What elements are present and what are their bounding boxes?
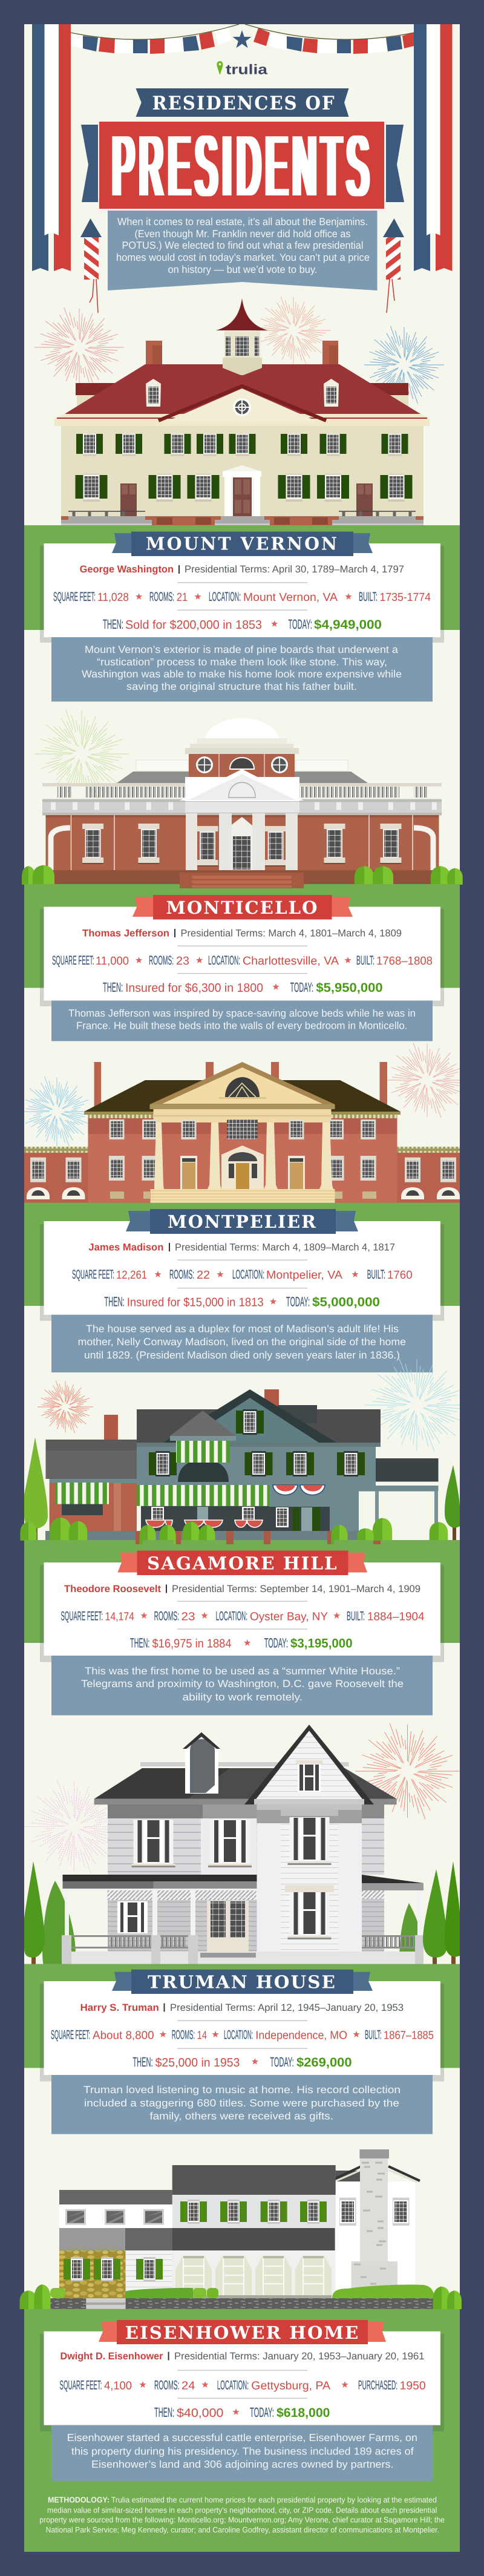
upper main wall — [172, 2195, 336, 2228]
roof balustrades — [136, 760, 348, 771]
fact box: ability to work remotely. — [183, 1691, 302, 1703]
cupola — [216, 298, 268, 375]
facts row: LOCATION: — [208, 954, 240, 968]
right front trees — [423, 1861, 460, 1964]
right rocket — [383, 218, 404, 313]
president and terms: Presidential Terms: January 20, 1953–January 20, 1961 — [174, 2351, 425, 2362]
stone wall — [50, 2298, 434, 2309]
wings — [76, 383, 408, 419]
facts row: 24 — [182, 2379, 195, 2392]
dormers — [146, 379, 339, 407]
intro text box: on history — but we’d vote to buy. — [168, 264, 317, 275]
right body and porch — [269, 1484, 438, 1531]
then and today prices — [103, 617, 382, 632]
then and today prices — [132, 2054, 352, 2070]
intro text box — [108, 211, 378, 290]
facts row: 21 — [177, 591, 188, 604]
facts row: BUILT: — [359, 590, 378, 604]
fireworks: monticello — [34, 710, 129, 798]
left upper roof — [59, 2190, 172, 2204]
fact box: this property during his presidency. The business included 189 acres of — [71, 2446, 414, 2457]
then and today prices: THEN: — [103, 617, 123, 632]
main awning — [137, 1485, 269, 1506]
then and today prices: TODAY: — [250, 2405, 274, 2420]
steps — [61, 516, 424, 526]
pediment — [180, 769, 304, 801]
info panel: mount vernon — [40, 531, 444, 701]
chimney centre — [264, 1389, 279, 1408]
fact box — [51, 1001, 433, 1041]
header: ribbons, bunting, logo and title — [32, 24, 453, 313]
fact box — [51, 1656, 433, 1716]
small dormer — [183, 1732, 220, 1794]
intro text box: (Even though Mr. Franklin never did hold office as — [134, 228, 351, 240]
shrubs — [22, 865, 463, 885]
facts row: ROOMS: — [149, 590, 174, 604]
facts row: LOCATION: — [217, 2378, 249, 2392]
fact box: Washington was able to make his home look more expensive while — [82, 669, 402, 680]
base vents — [110, 1191, 376, 1199]
facts row: 23 — [176, 955, 189, 968]
then and today prices: $40,000 — [177, 2407, 223, 2420]
banner: sagamore hill — [117, 1550, 367, 1575]
logo: trulia — [217, 61, 267, 77]
methodology note: METHODOLOGY: — [48, 2496, 110, 2505]
then and today prices: THEN: — [130, 1635, 149, 1651]
methodology note: property were sourced from the following: Monticello.org; Mountvernon.org; Amy Verone, chief curator at Sagamore Hill; the — [39, 2515, 445, 2525]
lawn and footer: eisenhower home — [24, 2309, 460, 2552]
fact box: France. He built these beds into the walls of every bedroom in Monticello. — [76, 1020, 408, 1032]
president and terms: Presidential Terms: April 12, 1945–January 20, 1953 — [170, 2002, 404, 2013]
left tree — [24, 1437, 48, 1541]
facts row — [53, 590, 431, 604]
banner: sagamore hill: SAGAMORE HILL — [147, 1553, 338, 1573]
wing windows — [339, 2198, 409, 2226]
then and today prices: THEN: — [132, 2054, 153, 2070]
steps — [150, 1189, 335, 1203]
cornice — [84, 1112, 401, 1118]
chimney — [352, 2149, 397, 2289]
house illustration: sagamore hill — [20, 1389, 460, 1544]
president and terms: George Washington — [80, 564, 174, 575]
pediment — [159, 386, 326, 422]
left upper windows — [65, 2209, 164, 2225]
facts row: Charlottesville, VA — [243, 955, 339, 968]
brick base — [61, 516, 424, 526]
then and today prices: $269,000 — [296, 2056, 352, 2070]
fact box: Eisenhower’s land and 306 adjoining acres owned by partners. — [91, 2459, 393, 2470]
drum with round windows — [189, 754, 295, 777]
lawn: mount vernon — [24, 525, 460, 630]
facts row: 11,028 — [97, 591, 129, 604]
porch window — [117, 1901, 148, 1933]
methodology note: Trulia estimated the current home prices for each presidential property by looking at the estimated — [111, 2496, 437, 2505]
banner: monticello: MONTICELLO — [166, 897, 318, 918]
house illustration: truman house — [24, 1725, 460, 1974]
lunette windows — [27, 1187, 460, 1199]
president and terms: Dwight D. Eisenhower — [60, 2351, 163, 2362]
upper windows — [149, 1451, 365, 1476]
wings — [24, 1147, 460, 1203]
upper balustrade — [42, 783, 442, 798]
central door — [230, 817, 253, 873]
facts row: 14,174 — [105, 1611, 134, 1624]
facts row: BUILT: — [367, 1268, 385, 1282]
dome — [185, 718, 299, 754]
chimney left — [104, 1415, 118, 1440]
fact box: until 1829. (President Madison died only seven years later in 1836.) — [84, 1349, 400, 1361]
banner: mount vernon — [112, 531, 373, 556]
president and terms — [80, 564, 404, 575]
facts row: SQUARE FEET: — [51, 2028, 90, 2042]
lower porch — [141, 1506, 269, 1531]
main roof — [94, 1768, 397, 1799]
card shadow — [40, 1984, 444, 2082]
left rocket — [80, 218, 102, 313]
president and terms: Thomas Jefferson — [82, 928, 169, 939]
card — [44, 906, 440, 1001]
main wall — [88, 1118, 397, 1203]
side doors — [180, 1156, 305, 1189]
facts row: SQUARE FEET: — [72, 1268, 114, 1282]
lawn: montpelier — [24, 1203, 460, 1306]
upper awning — [176, 1441, 230, 1463]
banner: truman house: TRUMAN HOUSE — [148, 1971, 336, 1992]
then and today prices: Sold for $200,000 in 1853 — [125, 618, 262, 632]
president and terms: Presidential Terms: September 14, 1901–March 4, 1909 — [172, 1584, 420, 1594]
president and terms: Presidential Terms: March 4, 1801–March 4, 1809 — [180, 928, 402, 939]
then and today prices: $25,000 in 1953 — [155, 2056, 240, 2070]
facts row: 1768–1808 — [376, 955, 433, 968]
lawn: truman house — [24, 1964, 460, 2068]
facts row: SQUARE FEET: — [52, 954, 94, 968]
facts row — [60, 1610, 425, 1624]
facts row: 14 — [197, 2030, 207, 2042]
porch lattice — [108, 1889, 384, 1952]
banner: eisenhower home — [99, 2320, 386, 2344]
fact box: family, others were received as gifts. — [149, 2111, 333, 2122]
card shadow — [40, 909, 444, 1006]
facts row — [52, 954, 433, 968]
then and today prices: $618,000 — [276, 2406, 330, 2420]
gable window — [236, 1409, 264, 1435]
bunting centre star — [233, 30, 251, 48]
house illustration: eisenhower home — [20, 2149, 462, 2309]
facts row: BUILT: — [365, 2028, 382, 2042]
facts row: 1884–1904 — [367, 1611, 425, 1624]
facts row — [51, 2028, 434, 2042]
president and terms: Presidential Terms: April 30, 1789–March 4, 1797 — [185, 564, 404, 575]
facts row: 12,261 — [116, 1269, 147, 1282]
intro text box: When it comes to real estate, it’s all about the Benjamins. — [117, 216, 368, 228]
then and today prices: THEN: — [104, 1294, 125, 1309]
fireworks: truman house — [24, 1723, 459, 1873]
facts row: PURCHASED: — [358, 2378, 397, 2392]
fireworks: sagamore hill — [38, 1358, 469, 1452]
bunting left — [71, 24, 239, 54]
facts row: 1867–1885 — [384, 2030, 434, 2042]
then and today prices — [104, 1294, 380, 1309]
president and terms — [60, 2351, 425, 2362]
title banner: residences of — [136, 88, 348, 117]
card shadow — [40, 1224, 444, 1321]
fireworks: montpelier — [21, 1043, 468, 1147]
facts row: ROOMS: — [172, 2028, 195, 2042]
then and today prices — [130, 1635, 353, 1651]
columns — [154, 1122, 333, 1189]
fact box — [51, 1315, 433, 1372]
fact box: saving the original structure that his father built. — [126, 681, 357, 692]
then and today prices: $3,195,000 — [290, 1636, 353, 1651]
fact box — [51, 637, 433, 701]
then and today prices: $5,000,000 — [312, 1296, 380, 1309]
facts row: 1950 — [400, 2379, 426, 2392]
house illustration: montpelier — [24, 1062, 460, 1203]
facts row: Independence, MO — [255, 2030, 347, 2042]
porch roofs — [59, 2228, 335, 2250]
big gable — [244, 1725, 374, 1804]
hedges and shrubs — [20, 2284, 462, 2309]
fact box: mother, Nelly Conway Madison, lived on the original side of the home — [78, 1336, 406, 1348]
banner: truman house — [112, 1970, 373, 1994]
main body — [137, 1446, 376, 1486]
grey roof — [117, 772, 368, 783]
lower windows — [64, 2257, 163, 2281]
methodology note: National Park Service; Meg Kennedy, curator; and Caroline Godfrey, assistant director of communications at Montpelier. — [46, 2525, 439, 2534]
main roof — [84, 1080, 401, 1112]
portico and front door — [223, 465, 261, 516]
facts row: 23 — [182, 1611, 195, 1624]
fact box: Mount Vernon’s exterior is made of pine boards that underwent a — [85, 644, 399, 655]
facts row: LOCATION: — [232, 1268, 264, 1282]
side windows and door — [276, 1507, 320, 1531]
central door portico — [221, 1145, 264, 1189]
fact box: Thomas Jefferson was inspired by space-saving alcove beds while he was in — [68, 1008, 416, 1019]
main gable — [163, 1389, 336, 1443]
left upper wall — [59, 2204, 172, 2228]
then and today prices: $5,950,000 — [316, 981, 383, 995]
then and today prices: TODAY: — [286, 1294, 310, 1309]
chimneys — [146, 341, 338, 369]
porch roof — [63, 1875, 424, 1950]
upper windows — [76, 434, 408, 456]
house illustration: mount vernon — [54, 298, 430, 526]
lawn: sagamore hill — [24, 1540, 460, 1643]
facts row: LOCATION: — [216, 1610, 247, 1624]
info panel: monticello — [40, 895, 444, 1041]
intro text box: homes would cost in today’s market. You can’t put a price — [116, 252, 370, 263]
windows — [82, 824, 402, 867]
title side ribbons — [81, 125, 404, 202]
entablature band — [42, 799, 442, 816]
facts row: 22 — [197, 1269, 210, 1282]
intro text box: POTUS.) We elected to find out what a few presidential — [122, 240, 363, 251]
right hanging ribbons — [414, 24, 453, 271]
card — [44, 1221, 440, 1315]
facts row: ROOMS: — [149, 954, 174, 968]
stone section — [59, 2250, 126, 2298]
card shadow — [40, 1565, 444, 1662]
chimneys — [94, 1062, 387, 1107]
president and terms: Harry S. Truman — [80, 2002, 159, 2013]
facts row — [72, 1268, 413, 1282]
eaves — [94, 1799, 397, 1804]
then and today prices: TODAY: — [288, 617, 312, 632]
back trees — [42, 1881, 424, 1974]
cornice — [54, 414, 430, 426]
white siding section — [126, 2250, 172, 2298]
methodology note — [39, 2496, 445, 2534]
fact box: Telegrams and proximity to Washington, D.C. gave Roosevelt the — [81, 1678, 404, 1689]
left front tree — [24, 1861, 45, 1964]
lower windows — [30, 1156, 456, 1182]
bunting right — [245, 24, 414, 54]
garage — [172, 2250, 335, 2298]
then and today prices: TODAY: — [290, 980, 313, 995]
then and today prices: THEN: — [103, 980, 123, 995]
banner: mount vernon: MOUNT VERNON — [146, 534, 339, 554]
porch railing — [71, 1935, 417, 1948]
fireworks: mount vernon — [34, 297, 444, 404]
left wing — [46, 1440, 145, 1531]
house illustration: monticello — [22, 718, 463, 888]
facts row: Mount Vernon, VA — [243, 591, 338, 604]
upper windows — [180, 2200, 327, 2224]
upper main roof — [172, 2165, 336, 2195]
banner: montpelier — [126, 1209, 358, 1234]
fact box: “rustication” process to make them look like stone. This way, — [97, 656, 387, 668]
side doors and railings — [68, 483, 416, 516]
left hanging ribbons — [32, 24, 71, 271]
right tree — [445, 1465, 460, 1541]
facts row: Oyster Bay, NY — [250, 1611, 328, 1624]
president and terms — [82, 928, 402, 939]
facts row — [59, 2378, 426, 2392]
siding walls — [108, 1804, 384, 1875]
card shadow — [40, 546, 444, 643]
brick walls — [46, 815, 439, 871]
then and today prices: TODAY: — [264, 1635, 288, 1651]
info panel: montpelier — [40, 1209, 444, 1372]
facts row: ROOMS: — [154, 1610, 179, 1624]
lawn: monticello — [24, 884, 460, 988]
president and terms — [64, 1584, 420, 1594]
card — [44, 543, 440, 637]
fact box: This was the first home to be used as a “summer White House.” — [85, 1665, 400, 1677]
info panel: eisenhower home — [40, 2320, 444, 2481]
base — [46, 870, 439, 884]
facts row: BUILT: — [356, 954, 374, 968]
fact box — [51, 2075, 433, 2134]
walls — [61, 426, 424, 517]
card — [44, 1562, 440, 1656]
foundation — [62, 1935, 424, 1964]
main roof — [65, 364, 420, 414]
card — [44, 1981, 440, 2075]
then and today prices: Insured for $15,000 in 1813 — [127, 1296, 264, 1309]
patriotic bunting — [146, 1485, 325, 1527]
banner: montpelier: MONTPELIER — [168, 1211, 317, 1232]
card shadow — [40, 2334, 444, 2431]
tower windows — [285, 1817, 334, 1939]
arched porch — [178, 1460, 229, 1482]
facts row: About 8,800 — [93, 2030, 154, 2042]
then and today prices: $4,949,000 — [314, 618, 382, 632]
facts row: BUILT: — [347, 1610, 365, 1624]
facts row: ROOMS: — [154, 2378, 179, 2392]
base band — [45, 1531, 376, 1540]
upper windows — [109, 1119, 376, 1139]
facts row: LOCATION: — [209, 590, 241, 604]
front gable — [170, 1411, 236, 1441]
fact box: Eisenhower started a successful cattle enterprise, Eisenhower Farms, on — [67, 2432, 417, 2443]
then and today prices: THEN: — [154, 2405, 174, 2420]
then and today prices: $16,975 in 1884 — [152, 1637, 231, 1651]
facts row: ROOMS: — [169, 1268, 194, 1282]
facts row: SQUARE FEET: — [53, 590, 96, 604]
methodology note: median value of similar-sized homes in each property’s neighborhood, city, or ZIP code. Details about each presidential — [47, 2505, 437, 2514]
steps — [180, 873, 304, 888]
lower windows — [75, 473, 413, 502]
then and today prices — [103, 980, 383, 995]
columns — [186, 813, 298, 873]
centre tower — [257, 1804, 362, 1953]
logo: trulia: trulia — [226, 62, 267, 77]
info panel: truman house — [40, 1970, 444, 2134]
banner: monticello — [132, 895, 353, 920]
posts — [136, 1531, 381, 1544]
card — [44, 2332, 440, 2425]
right wing — [330, 2166, 420, 2289]
facts row: SQUARE FEET: — [59, 2378, 102, 2392]
then and today prices: Insured for $6,300 in 1800 — [125, 982, 263, 995]
windows second floor — [132, 1820, 252, 1867]
president and terms: James Madison — [88, 1242, 163, 1253]
facts row: LOCATION: — [224, 2028, 253, 2042]
facts row: Gettysburg, PA — [251, 2379, 330, 2392]
title banner: residences of: RESIDENCES OF — [152, 93, 335, 114]
facts row: 1760 — [387, 1269, 413, 1282]
facts row: Montpelier, VA — [266, 1269, 342, 1282]
eave band — [137, 1443, 381, 1447]
facts row: 4,100 — [104, 2379, 132, 2392]
fact box: The house served as a duplex for most of Madison’s adult life! His — [86, 1323, 399, 1335]
fact box: included a staggering 680 titles. Some were purchased by the — [84, 2097, 399, 2109]
main roof — [137, 1405, 381, 1446]
facts row: SQUARE FEET: — [60, 1610, 103, 1624]
president and terms: Presidential Terms: March 4, 1809–March 4, 1817 — [175, 1242, 395, 1253]
fact box: Truman loved listening to music at home. His record collection — [83, 2084, 401, 2096]
facts row: 11,000 — [96, 955, 129, 968]
facts row: 1735-1774 — [380, 591, 431, 604]
president and terms: Theodore Roosevelt — [64, 1584, 161, 1594]
porch walls — [108, 1893, 384, 1952]
banner: eisenhower home: EISENHOWER HOME — [125, 2322, 359, 2343]
front door — [207, 1901, 249, 1952]
pediment — [150, 1062, 335, 1122]
then and today prices: TODAY: — [270, 2054, 294, 2070]
info panel: sagamore hill — [40, 1550, 444, 1716]
roof cap — [140, 1762, 348, 1766]
then and today prices — [154, 2405, 330, 2420]
right wing roof — [376, 1458, 438, 1481]
left wing awning — [55, 1483, 109, 1504]
shrubs — [20, 1518, 448, 1544]
fact box — [51, 2425, 433, 2481]
